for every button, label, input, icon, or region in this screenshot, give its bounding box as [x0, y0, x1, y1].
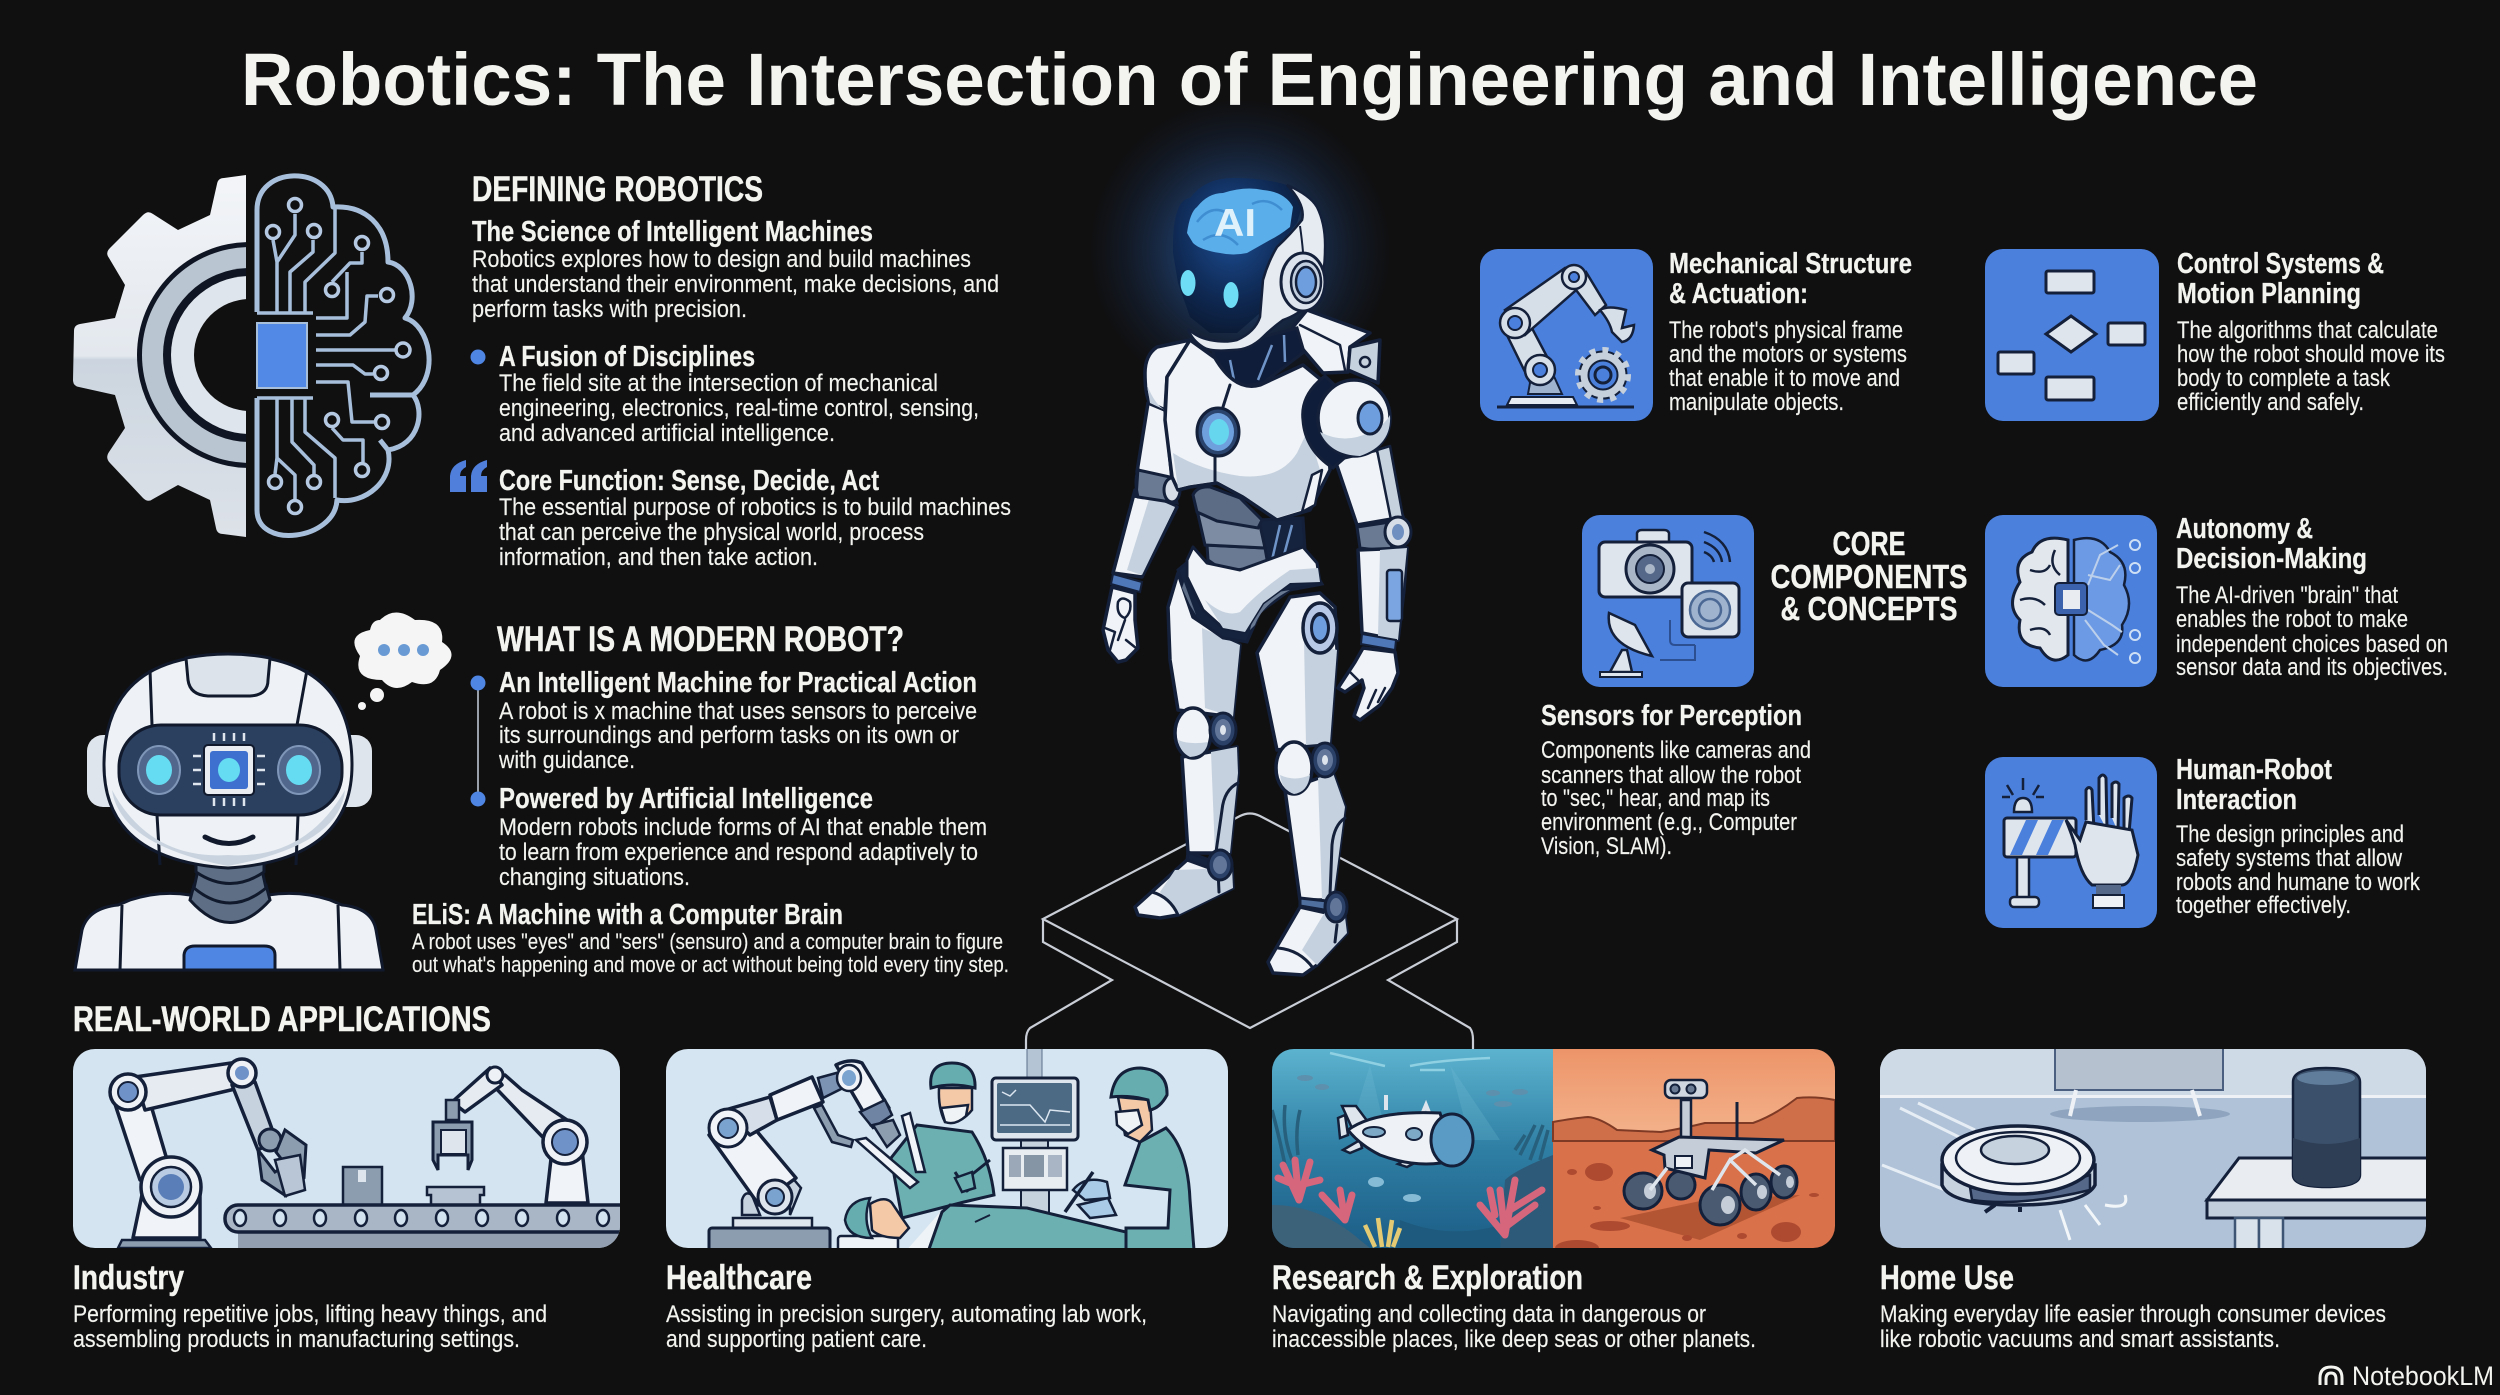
label — [73, 1259, 547, 1353]
monitor — [992, 1078, 1078, 1140]
block: a fusion of disciplines: and advanced artificial intelligence. — [499, 420, 835, 447]
label: Home Use — [1880, 1259, 2014, 1297]
block: core function: Core Function: Sense, Decide, Act — [499, 465, 879, 497]
label: Healthcare — [666, 1259, 812, 1297]
heading: WHAT IS A MODERN ROBOT? — [497, 620, 904, 659]
box — [343, 1167, 382, 1205]
block: core function: information, and then take action. — [499, 544, 818, 571]
head — [104, 655, 352, 868]
icon: friendly robot head and shoulders — [75, 654, 383, 970]
left arm — [1103, 403, 1180, 662]
pelvis — [1178, 547, 1322, 642]
label: Assisting in precision surgery, automating lab work, — [666, 1301, 1147, 1328]
icon: quotation mark — [450, 460, 487, 492]
label: like robotic vacuums and smart assistants. — [1880, 1326, 2280, 1353]
neck — [190, 855, 270, 922]
text: sensors for perception: Sensors for Perception — [1541, 700, 1802, 732]
label: Industry — [73, 1259, 184, 1297]
icon: gear and circuit brain — [73, 175, 429, 537]
block: powered by ai: to learn from experience and respond adaptively to — [499, 839, 978, 866]
text: autonomy — [2176, 513, 2448, 681]
icon: sensors — [1582, 515, 1754, 687]
text: mechanical structure: & Actuation: — [1669, 278, 1808, 310]
block: a fusion of disciplines — [499, 341, 979, 447]
block: machine with a computer brain — [412, 899, 1009, 977]
bullet dot — [470, 350, 486, 364]
eye right — [278, 746, 320, 794]
panel: home use — [1880, 1045, 2431, 1353]
heading: DEFINING ROBOTICS — [472, 170, 763, 209]
label: and supporting patient care. — [666, 1326, 927, 1353]
block: powered by ai: Powered by Artificial Intelligence — [499, 783, 873, 815]
eye left — [138, 746, 180, 794]
icon: mechanical arm — [1480, 249, 1653, 421]
text: control systems: efficiently and safely. — [2177, 389, 2364, 416]
panel: industry — [73, 1049, 645, 1353]
surgeon two — [1065, 1068, 1194, 1250]
central figure: platform — [1026, 814, 1473, 1050]
icon: brain with chip — [1985, 515, 2157, 687]
text: mechanical structure: The robot's physical frame — [1669, 317, 1903, 344]
text: control systems — [2177, 248, 2445, 416]
section: core components and concepts — [1480, 248, 2448, 928]
block: core function — [499, 465, 1011, 571]
block: the science of intelligent machines: that understand their environment, make decisions, and — [472, 271, 999, 298]
block: intelligent machine: its surroundings and perform tasks on its own or — [499, 722, 959, 749]
text: autonomy: sensor data and its objectives. — [2176, 654, 2448, 681]
text: human-robot interaction: Interaction — [2176, 784, 2297, 816]
hip joint — [1303, 603, 1337, 653]
text: sensors for perception — [1541, 700, 1811, 860]
shoulders — [75, 893, 383, 970]
text: mechanical structure — [1669, 248, 1912, 416]
label: Navigating and collecting data in dangerous or — [1272, 1301, 1706, 1328]
text: sensors for perception: to "sec," hear, and map its — [1541, 785, 1770, 812]
right leg — [1257, 593, 1347, 975]
patient — [838, 1198, 1126, 1252]
vacuum — [1942, 1126, 2126, 1240]
smart speaker — [2293, 1068, 2360, 1187]
block: machine with a computer brain: ELiS: A Machine with a Computer Brain — [412, 899, 843, 931]
mouth — [205, 837, 253, 844]
text: human-robot interaction: robots and humane to work — [2176, 869, 2421, 896]
heading — [1770, 525, 1968, 627]
panel: research and exploration — [1272, 1049, 1835, 1353]
ai label: AI — [1214, 202, 1256, 245]
label: assembling products in manufacturing settings. — [73, 1326, 520, 1353]
head glow — [1090, 100, 1390, 400]
section: defining robotics — [450, 170, 1011, 571]
icon: barrier and robot hand — [1985, 757, 2157, 928]
neck — [1213, 328, 1304, 387]
text: autonomy: enables the robot to make — [2176, 606, 2408, 633]
illustration: robotic surgery — [666, 1045, 1228, 1252]
gear half — [73, 175, 246, 537]
text: autonomy: Autonomy & — [2176, 513, 2313, 545]
block: powered by ai: Modern robots include forms of AI that enable them — [499, 814, 987, 841]
text: human-robot interaction: safety systems that allow — [2176, 845, 2403, 872]
head — [1173, 178, 1325, 351]
face dome — [1173, 178, 1303, 333]
ears — [87, 735, 372, 807]
text: human-robot interaction: The design principles and — [2176, 821, 2404, 848]
brain outline — [257, 176, 429, 535]
text: autonomy: The AI-driven "brain" that — [2176, 582, 2398, 609]
text: control systems: body to complete a task — [2177, 365, 2391, 392]
block: a fusion of disciplines: The field site at the intersection of mechanical — [499, 370, 938, 397]
text: sensors for perception: scanners that allow the robot — [1541, 762, 1801, 789]
right arm — [1335, 446, 1411, 720]
text: human-robot interaction: together effectively. — [2176, 892, 2351, 919]
circuit traces — [257, 198, 410, 514]
label: Research & Exploration — [1272, 1259, 1583, 1297]
mars — [1553, 1049, 1835, 1131]
right arm — [546, 1150, 588, 1203]
illustration: submarine and rover — [1272, 1049, 1835, 1256]
shoulder socket and ball — [1302, 376, 1390, 512]
block: the science of intelligent machines: The Science of Intelligent Machines — [472, 216, 873, 248]
waist — [1193, 487, 1305, 572]
ear ring — [1281, 253, 1325, 311]
head top panel — [186, 654, 270, 696]
surgeon one — [891, 1063, 994, 1218]
conveyor — [238, 1228, 620, 1248]
block: a fusion of disciplines: A Fusion of Disciplines — [499, 341, 755, 373]
illustration: factory arms — [73, 1049, 645, 1250]
visor — [119, 725, 342, 815]
left leg — [1135, 573, 1240, 918]
text: mechanical structure: manipulate objects. — [1669, 389, 1844, 416]
text: mechanical structure: and the motors or systems — [1669, 341, 1907, 368]
chest core — [1197, 408, 1239, 456]
block: intelligent machine: A robot is x machine that uses sensors to perceive — [499, 698, 977, 725]
panel: healthcare — [666, 1045, 1228, 1353]
timeline markers — [470, 676, 486, 806]
block: a fusion of disciplines: engineering, electronics, real-time control, sensing, — [499, 395, 979, 422]
monitor stand — [1026, 1049, 1042, 1076]
heading: CORE — [1832, 525, 1906, 562]
thought bubble — [354, 612, 452, 710]
block: powered by ai: changing situations. — [499, 864, 690, 891]
text: control systems: Motion Planning — [2177, 278, 2361, 310]
block: machine with a computer brain: A robot uses "eyes" and "sers" (sensuro) and a computer brain to figure — [412, 929, 1003, 954]
processor chip — [254, 316, 312, 394]
text: sensors for perception: environment (e.g., Computer — [1541, 809, 1797, 836]
helmet shell — [1188, 185, 1325, 351]
text: control systems: how the robot should move its — [2177, 341, 2445, 368]
block: core function: The essential purpose of robotics is to build machines — [499, 494, 1011, 521]
tv — [2055, 1045, 2223, 1116]
block: the science of intelligent machines — [472, 216, 999, 323]
submarine — [1338, 1095, 1473, 1167]
icon: flowchart — [1985, 249, 2159, 421]
block: powered by ai — [499, 783, 987, 891]
heading: COMPONENTS — [1770, 558, 1968, 595]
text: autonomy: independent choices based on — [2176, 631, 2448, 658]
label — [1880, 1259, 2386, 1353]
glowing eyes — [1180, 270, 1196, 296]
text: mechanical structure: Mechanical Structure — [1669, 248, 1912, 280]
ocean — [1272, 1049, 1553, 1248]
block: the science of intelligent machines: perform tasks with precision. — [472, 296, 747, 323]
backpack — [1293, 310, 1380, 383]
chest tag — [184, 946, 275, 970]
label — [1272, 1259, 1756, 1353]
block: intelligent machine — [498, 667, 977, 774]
block: the science of intelligent machines: Robotics explores how to design and build machines — [472, 246, 971, 273]
chip — [193, 733, 265, 806]
text: human-robot interaction — [2176, 754, 2421, 919]
text: sensors for perception: Vision, SLAM). — [1541, 833, 1672, 860]
label: Making everyday life easier through consumer devices — [1880, 1301, 2386, 1328]
heading: & CONCEPTS — [1780, 590, 1958, 627]
text: sensors for perception: Components like cameras and — [1541, 737, 1811, 764]
illustration: robot vacuum and smart speaker — [1880, 1045, 2431, 1252]
robot arm — [709, 1061, 925, 1252]
sea floor — [1272, 1205, 1370, 1248]
section heading: real-world applications: REAL-WORLD APPLICATIONS — [73, 1000, 491, 1039]
text: control systems: Control Systems & — [2177, 248, 2384, 280]
elbow joint left detail — [1136, 468, 1138, 498]
section: what is a modern robot — [412, 620, 1009, 977]
torso — [1145, 340, 1330, 520]
block: machine with a computer brain: out what's happening and move or act without being told every tiny step. — [412, 952, 1009, 977]
text: mechanical structure: that enable it to move and — [1669, 365, 1900, 392]
rover — [1624, 1080, 1797, 1225]
label — [666, 1259, 1147, 1353]
left arm — [133, 1190, 200, 1238]
table — [2207, 1158, 2431, 1252]
block: intelligent machine: An Intelligent Machine for Practical Action — [499, 667, 977, 699]
block: core function: that can perceive the physical world, process — [499, 519, 924, 546]
text: control systems: The algorithms that calculate — [2177, 317, 2438, 344]
text: autonomy: Decision-Making — [2176, 543, 2367, 575]
title: Robotics: The Intersection of Engineering and Intelligence — [241, 38, 2258, 121]
label: inaccessible places, like deep seas or other planets. — [1272, 1326, 1756, 1353]
fish — [1297, 1075, 1528, 1107]
tray — [427, 1187, 484, 1205]
central figure: humanoid robot — [1090, 100, 1411, 975]
label: Performing repetitive jobs, lifting heavy things, and — [73, 1301, 547, 1328]
corals — [1278, 1160, 1542, 1235]
text: human-robot interaction: Human-Robot — [2176, 754, 2332, 786]
ai brain dome — [1187, 189, 1293, 254]
block: intelligent machine: with guidance. — [498, 747, 635, 774]
